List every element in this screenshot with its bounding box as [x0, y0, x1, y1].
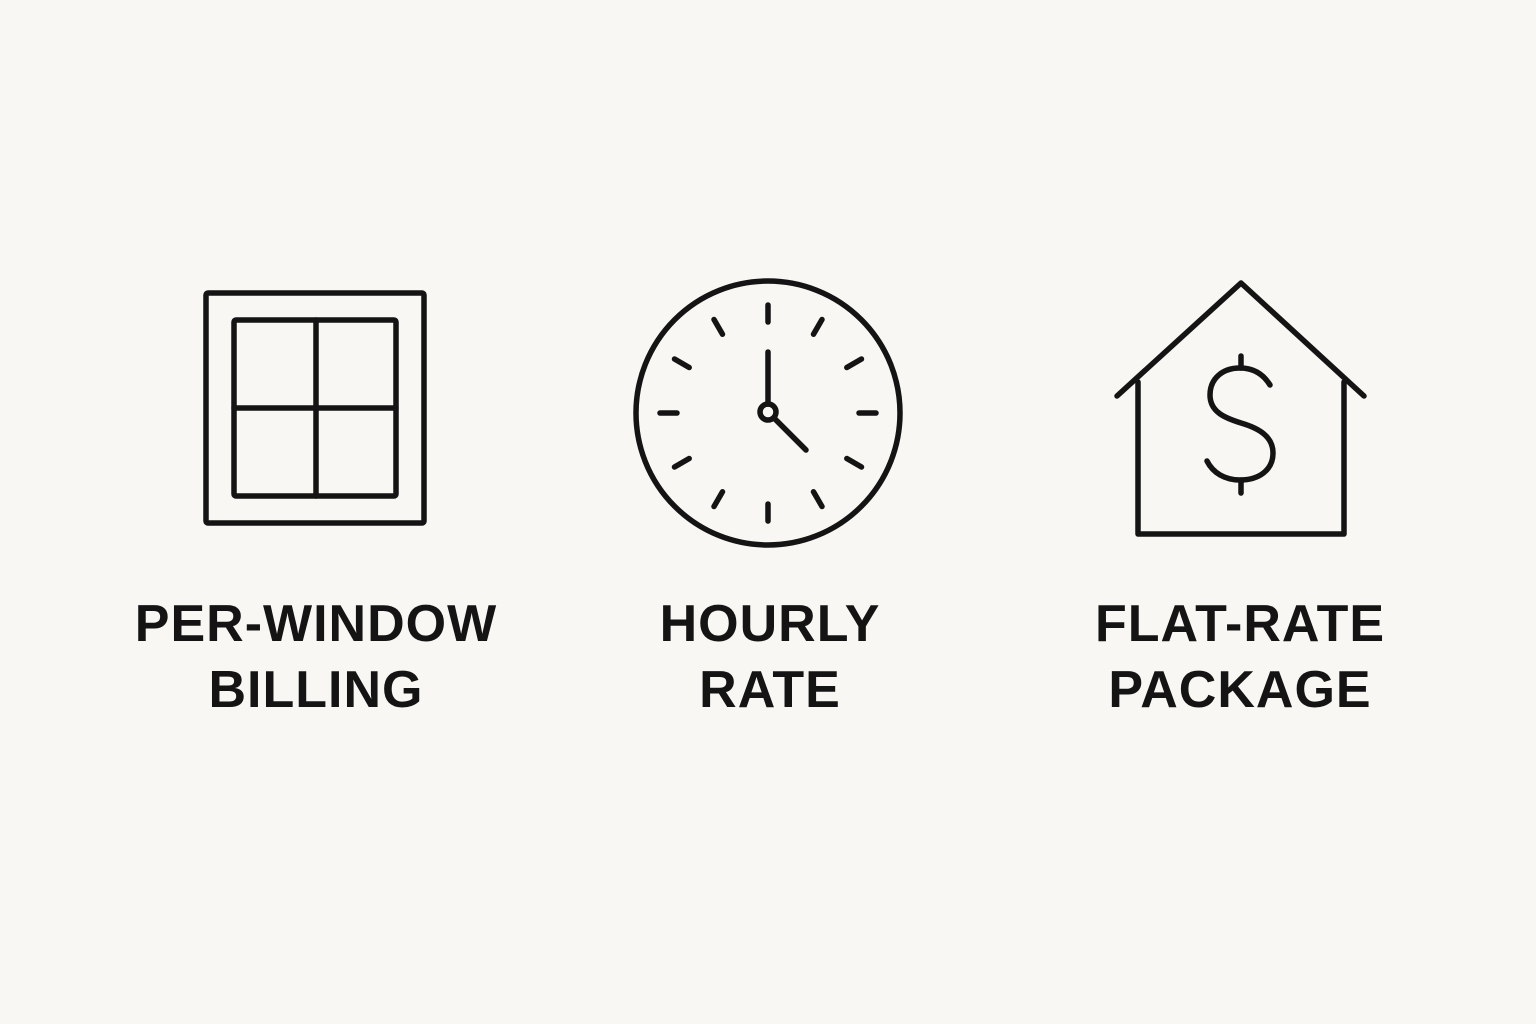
label: per-window billing: BILLING — [208, 661, 423, 719]
icon: house with dollar — [1117, 283, 1364, 534]
label: per-window billing: PER-WINDOW — [135, 595, 497, 653]
icon: window — [206, 293, 424, 523]
icon: clock — [636, 281, 900, 545]
label: flat-rate package: PACKAGE — [1108, 661, 1372, 719]
label: hourly rate: HOURLY — [660, 595, 880, 653]
label: per-window billing — [135, 595, 497, 719]
label: hourly rate — [660, 595, 880, 719]
label: flat-rate package: FLAT-RATE — [1095, 595, 1385, 653]
label: hourly rate: RATE — [699, 661, 841, 719]
label: flat-rate package — [1095, 595, 1385, 719]
